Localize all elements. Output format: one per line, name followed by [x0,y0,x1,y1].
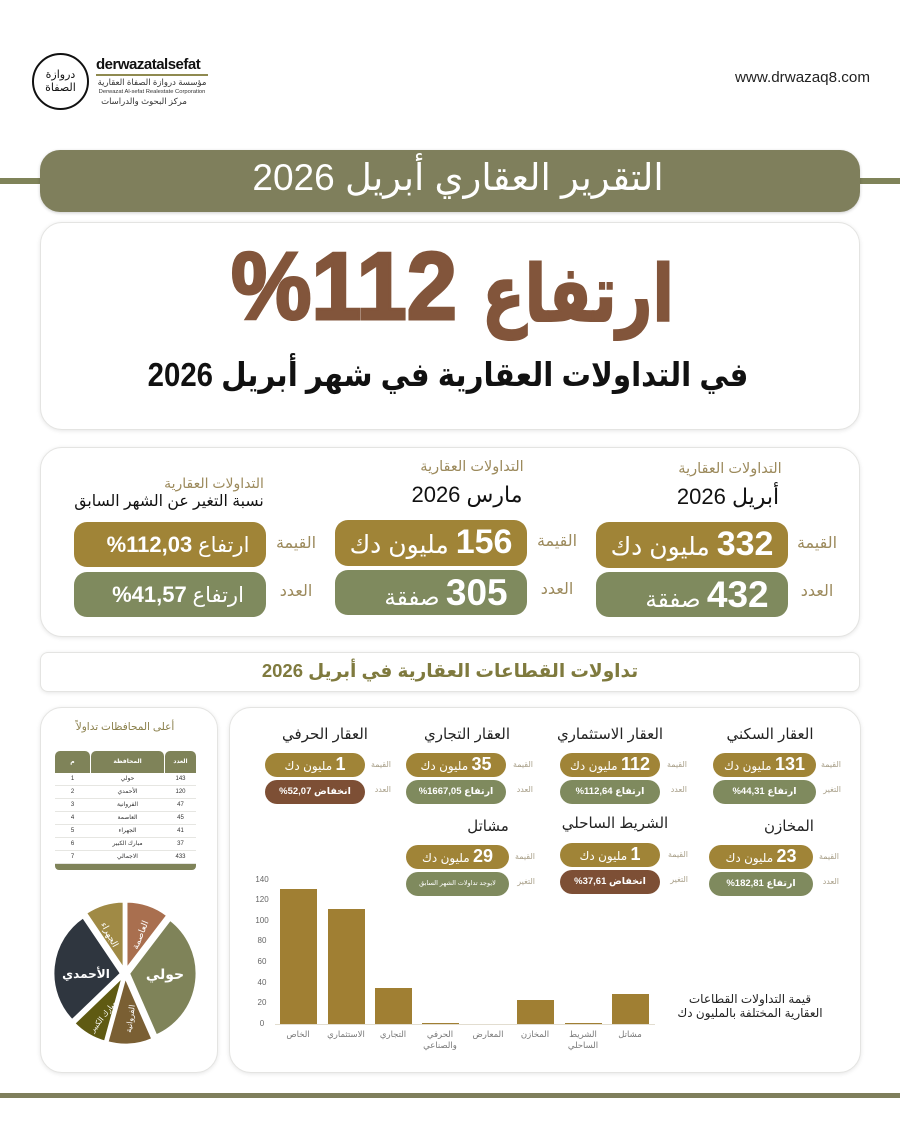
table rows: 6 [71,841,74,847]
section title: تداولات القطاعات العقارية في أبريل 2026 [262,660,638,681]
residential labels: التغير [823,785,841,794]
table header: م [70,759,75,765]
column: change [74,475,316,617]
sector: investment [557,726,687,804]
warehouses change: ارتفاع 182,81% [726,878,796,889]
panel: headline [40,222,860,430]
commercial labels: القيمة [513,760,533,769]
panel: monthly stats [40,447,860,637]
coastal labels [668,850,688,884]
pie chart: مبارك الكبير [87,999,118,1035]
bar chart: الشريط الساحلي [568,1029,598,1050]
coastal labels: القيمة [668,850,688,859]
title: التقرير العقاري أبريل 2026 [252,157,664,198]
table footer [55,863,196,870]
table rows: الاجمالي [117,854,138,860]
crafts labels: القيمة [371,760,391,769]
commercial title: العقار التجاري [424,726,510,743]
bar chart: الاستثماري [327,1029,365,1039]
bar chart: 80 [258,936,266,945]
chart caption: قيمة التداولات القطاعات [689,992,811,1006]
coastal value: 1 مليون دك [580,844,640,864]
bar chart: المعارض [473,1029,503,1039]
sector: warehouses [709,818,839,896]
table header [55,751,196,773]
title band [0,150,900,214]
bar chart: 60 [258,957,266,966]
bar chart: 100 [255,916,269,925]
table rows: 45 [177,815,184,821]
pie chart: الجهراء [99,920,120,949]
crafts labels: العدد [375,785,391,794]
nurseries note: لايوجد تداولات الشهر السابق [419,880,496,887]
warehouses title: المخازن [764,818,814,835]
logo gold rule [96,74,208,76]
sector: crafts [265,726,391,804]
sector: nurseries [406,818,535,896]
april heading: أبريل 2026 [677,484,779,509]
crafts title: العقار الحرفي [282,726,368,743]
residential title: العقار السكني [727,726,813,743]
nurseries note [406,872,509,896]
table: governorates [55,751,196,870]
march heading: مارس 2026 [411,482,523,507]
warehouses value [709,845,813,869]
chart caption: العقارية المختلفة بالمليون دك [677,1006,823,1020]
table rows: 7 [71,854,74,860]
residential labels [821,760,841,794]
bar chart: التجاري [380,1029,406,1039]
panel: sectors [229,707,861,1073]
warehouses change [709,872,813,896]
change count pill: ارتفاع 41,57% [112,582,244,607]
crafts change [265,780,365,804]
pie chart: حولي [146,966,184,983]
investment labels [667,760,687,794]
table rows: مبارك الكبير [112,841,143,847]
april caption: التداولات العقارية [678,461,782,477]
bar chart: 0 [260,1019,264,1028]
residential labels: القيمة [821,760,841,769]
nurseries labels: القيمة [515,852,535,861]
change count pill [74,572,266,617]
coastal change [560,870,660,894]
march value pill: 156 مليون دك [350,523,512,561]
column: march [335,459,577,615]
chart caption [677,992,823,1020]
footer rule [0,1093,900,1098]
table rows: الفروانية [117,802,138,808]
sector: residential [713,726,841,804]
coastal labels: التغير [670,875,688,884]
logo department: مركز البحوث والدراسات [101,96,187,106]
warehouses value: 23 مليون دك [726,846,796,866]
investment value [560,753,660,777]
change value label: القيمة [276,535,316,552]
table rows: العاصمة [118,815,138,821]
bar chart: مشاتل [618,1029,642,1039]
sector: commercial [406,726,533,804]
bar chart [255,875,655,1050]
logo arabic name: مؤسسة دروازة الصفاة العقارية [98,77,206,87]
table rows: 3 [71,802,74,808]
coastal change: انخفاض 37,61% [574,876,646,887]
logo wordmark: derwazatalsefat [96,56,200,73]
april value label: القيمة [797,535,837,552]
bar chart: 40 [258,978,266,987]
bar chart: المخازن [521,1029,549,1039]
april count label: العدد [801,583,833,600]
commercial labels: العدد [517,785,533,794]
march count pill [335,570,527,615]
residential change [713,780,816,804]
headline figure: ارتفاع [482,250,674,338]
residential change: ارتفاع 44,31% [732,786,797,797]
table title: أعلى المحافظات تداولاً [76,721,174,733]
table rows: 120 [175,789,186,795]
change value pill [74,522,266,567]
logo emblem: دروازة [46,69,75,81]
nurseries labels [515,852,535,886]
warehouses labels: القيمة [819,852,839,861]
panel: governorates [40,707,218,1073]
march count label: العدد [541,581,573,598]
crafts change: انخفاض 52,07% [279,786,351,797]
panel: section heading [40,652,860,692]
nurseries labels: التغير [517,877,535,886]
warehouses labels: العدد [823,877,839,886]
investment change: ارتفاع 112,64% [576,786,644,797]
headline subtitle: في التداولات العقارية في شهر أبريل 2026 [148,356,748,393]
logo english name: Derwazat Al-sefat Realestate Corporation [99,89,205,95]
bar chart: الخاص [286,1029,310,1039]
april value pill: 332 مليون دك [611,525,773,563]
headline figure: %112 [231,233,457,340]
bar chart: 140 [255,875,269,884]
table rows: 433 [175,854,186,860]
crafts value: 1 مليون دك [285,754,345,774]
sector: coastal [560,815,688,894]
investment labels: العدد [671,785,687,794]
change count label: العدد [280,583,312,600]
table header: العدد [173,759,188,765]
coastal value [560,843,660,867]
table rows: 5 [71,828,74,834]
table rows: 47 [177,802,184,808]
commercial labels [513,760,533,794]
table rows: 1 [71,776,74,782]
pie chart: الفروانية [124,1004,137,1033]
logo [32,53,208,110]
pie chart: الأحمدي [62,966,110,981]
residential value: 131 مليون دك [724,754,805,774]
bar chart: 20 [258,998,266,1007]
table rows: حولي [121,776,134,782]
table rows: 4 [71,815,74,821]
change caption: التداولات العقارية [164,475,264,491]
table rows: 37 [177,841,184,847]
warehouses labels [819,852,839,886]
march count pill: 305 صفقة [384,572,508,613]
pie chart [54,902,196,1044]
investment value: 112 مليون دك [570,754,650,774]
nurseries value: 29 مليون دك [422,846,493,866]
table header: المحافظة [113,759,142,765]
table rows: الأحمدي [117,789,138,795]
table rows: 41 [177,828,184,834]
commercial value: 35 مليون دك [421,754,491,774]
crafts value [265,753,365,777]
headline figure [231,233,674,341]
table rows: 143 [175,776,186,782]
table rows: 2 [71,789,74,795]
march caption: التداولات العقارية [420,459,524,475]
bar chart: 120 [255,895,269,904]
residential value [713,753,816,777]
change heading: نسبة التغير عن الشهر السابق [74,493,264,510]
march value label: القيمة [537,533,577,550]
pie chart: العاصمة [130,919,150,951]
commercial change: ارتفاع 1667,05% [419,786,493,797]
nurseries title: مشاتل [467,818,509,835]
logo emblem: الصفاة [45,82,76,94]
coastal title: الشريط الساحلي [562,815,668,832]
commercial value [406,753,506,777]
website: www.drwazaq8.com [735,69,870,86]
bar chart: الحرفي والصناعي [423,1029,457,1050]
crafts labels [371,760,391,794]
nurseries value [406,845,509,869]
april count pill [596,572,788,617]
investment labels: القيمة [667,760,687,769]
table rows: الجهراء [119,828,136,834]
column: april [596,461,837,617]
investment title: العقار الاستثماري [557,726,663,743]
logo emblem [32,53,89,110]
table rows [55,776,196,864]
investment change [560,780,660,804]
april count pill: 432 صفقة [645,574,769,615]
change value pill: ارتفاع 112,03% [107,532,249,557]
commercial change [406,780,506,804]
